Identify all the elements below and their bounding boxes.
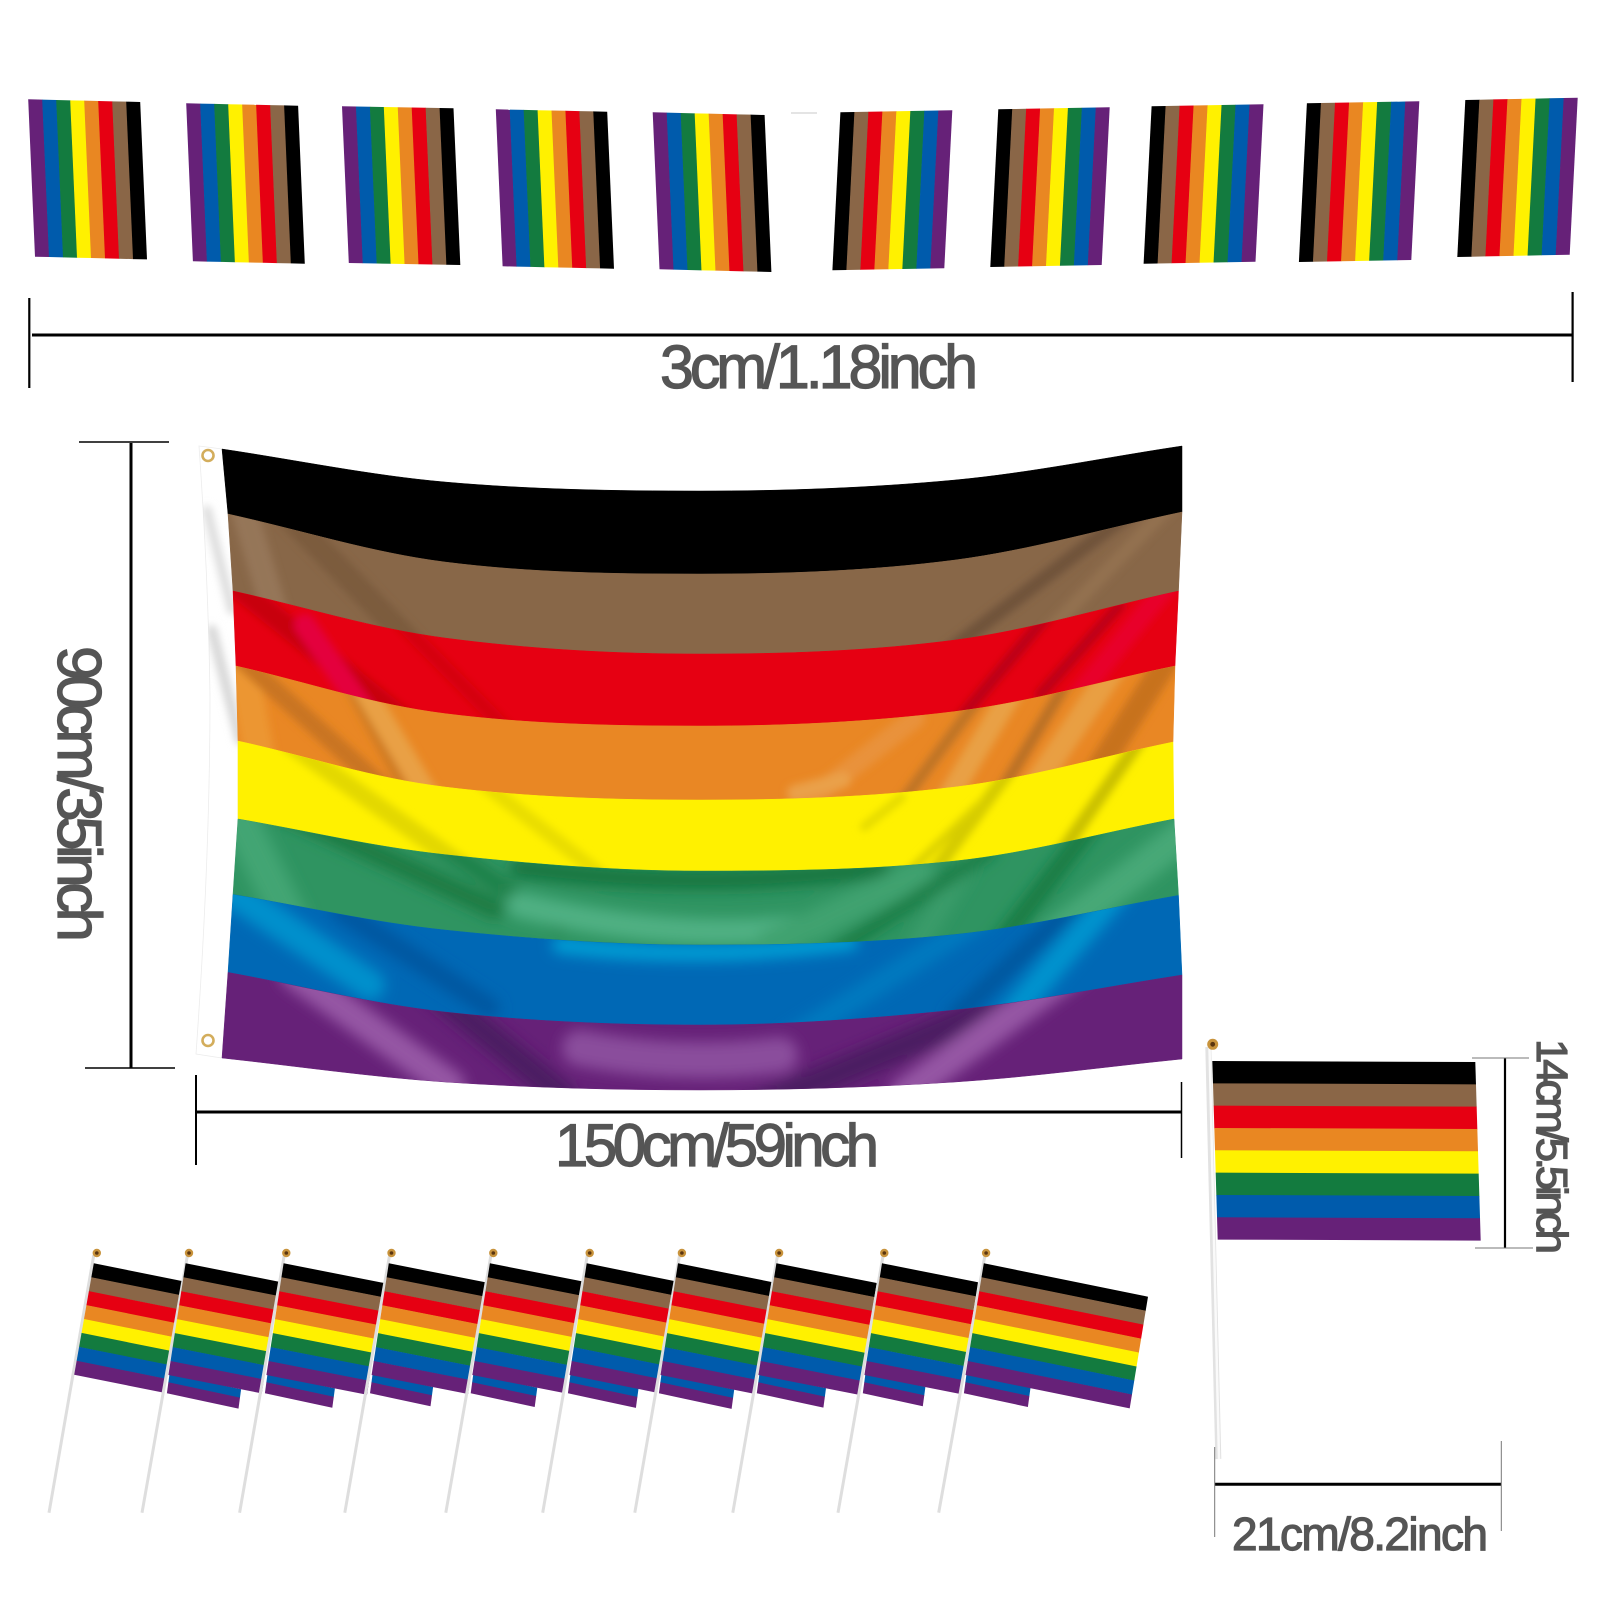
orange stripe <box>236 666 1176 800</box>
bunting flag 8 <box>1144 104 1264 264</box>
brown stripe <box>228 512 1182 654</box>
hand flag 1 <box>49 1249 182 1513</box>
bunting smudge <box>791 112 817 114</box>
flag stripes <box>1212 1061 1481 1241</box>
bunting flag 6 <box>832 110 952 270</box>
hand flag 6 <box>543 1249 674 1513</box>
panel: row of small hand flags <box>49 1249 1148 1513</box>
label: large flag width: 150cm/59inch <box>555 1112 879 1179</box>
red stripe <box>232 590 1179 726</box>
bunting flag 7 <box>990 107 1110 267</box>
panel: bunting flag string <box>28 98 1578 272</box>
flag pole <box>1208 1047 1219 1459</box>
bunting flag 3 <box>342 106 460 265</box>
bunting flag 1 <box>28 99 147 259</box>
green stripe <box>232 818 1179 945</box>
bunting flag 2 <box>186 103 305 264</box>
purple stripe <box>222 972 1182 1090</box>
bunting flag 4 <box>496 109 614 269</box>
hand flag 2 <box>142 1249 279 1513</box>
bunting flag 5 <box>653 112 771 272</box>
hand flag 3 <box>240 1249 384 1513</box>
hand flag 10 <box>939 1249 1148 1513</box>
panel: large waving flag <box>196 446 1200 1105</box>
panel: single hand flag <box>1207 1039 1481 1459</box>
label: large flag height: 90cm/35inch <box>44 646 113 942</box>
hand flag 9 <box>838 1249 978 1513</box>
blue stripe <box>228 894 1182 1025</box>
yellow stripe <box>238 740 1174 871</box>
hand flag 8 <box>733 1249 877 1513</box>
hand flag 4 <box>345 1249 485 1513</box>
label: bunting size: 3cm/1.18inch <box>660 333 978 401</box>
grommet <box>1207 1039 1218 1050</box>
label: hand flag height: 14cm/5.5inch <box>1527 1039 1576 1254</box>
bunting flag 9 <box>1299 101 1419 262</box>
bunting flag 10 <box>1457 98 1578 257</box>
black stripe <box>222 446 1182 574</box>
label: hand flag width: 21cm/8.2inch <box>1232 1508 1488 1560</box>
hand flag 5 <box>446 1249 582 1513</box>
white hem with grommets <box>196 446 240 1058</box>
hand flag 7 <box>635 1249 772 1513</box>
